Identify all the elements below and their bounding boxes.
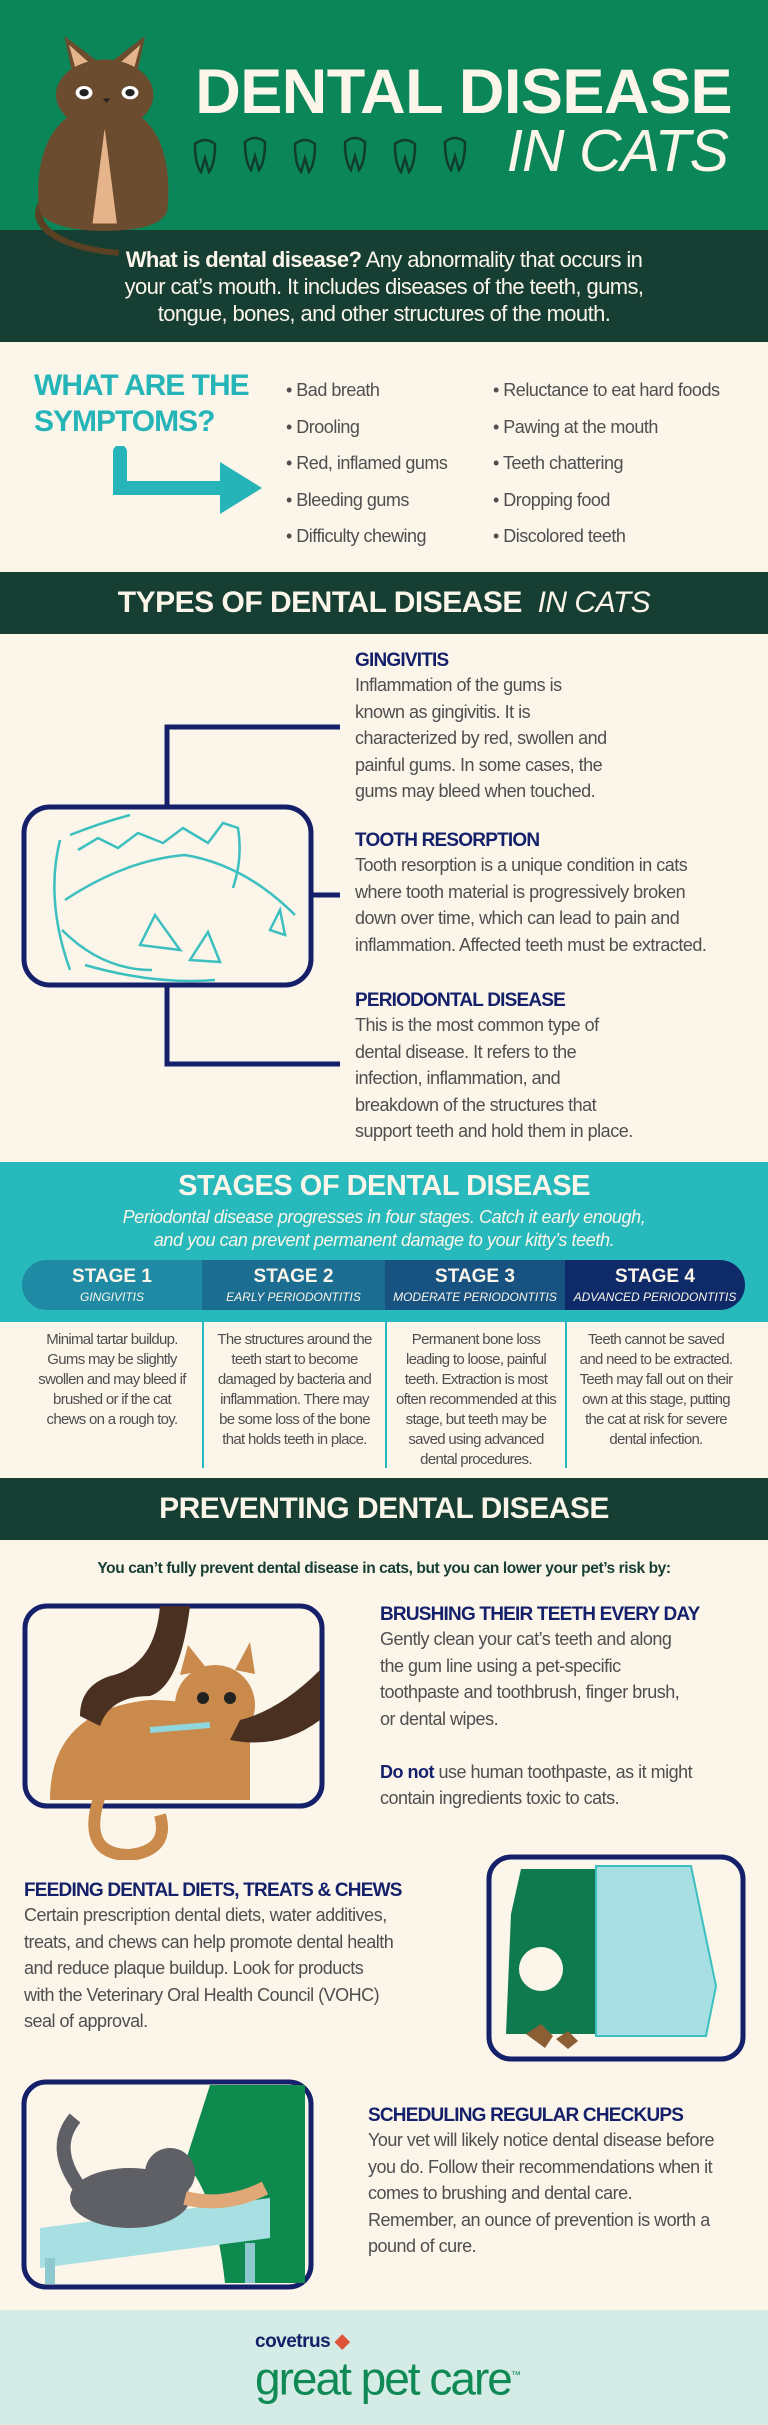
stage descriptions: be some loss of the bone (219, 1411, 370, 1428)
definition band (0, 230, 768, 342)
text: tooth resorption: inflammation. Affected teeth must be extracted. (355, 934, 706, 954)
stage pill: STAGE 4 (615, 1266, 695, 1287)
text: tooth resorption: Tooth resorption is a unique condition in cats (355, 855, 687, 875)
text: feeding (24, 1880, 402, 2031)
stage descriptions: dental procedures. (420, 1451, 532, 1468)
symptoms list: • Drooling (286, 416, 359, 436)
mouth diagram with connectors (22, 724, 340, 1066)
stage pill (22, 1260, 745, 1310)
illustration: vet checkup (22, 2080, 314, 2290)
stage descriptions (38, 1322, 733, 1468)
types band (0, 572, 768, 634)
symptoms list: • Red, inflamed gums (286, 453, 447, 473)
text: brushing: or dental wipes. (380, 1708, 498, 1728)
stage descriptions: teeth start to become (231, 1351, 358, 1368)
stage pill: MODERATE PERIODONTITIS (393, 1290, 557, 1304)
title: IN CATS (507, 118, 728, 184)
text: feeding: and reduce plaque buildup. Look for products (24, 1958, 363, 1978)
text: • Pawing at the mouth (493, 416, 658, 436)
text: • Discolored teeth (493, 526, 625, 546)
text: tooth resorption: where tooth material is progressively broken (355, 882, 685, 902)
text: periodontal: dental disease. It refers to the (355, 1042, 576, 1062)
stage descriptions: Permanent bone loss (412, 1331, 540, 1348)
text: • Reluctance to eat hard foods (493, 380, 719, 400)
preventing band (0, 1478, 768, 1540)
text: tooth resorption (355, 830, 706, 954)
text: feeding: treats, and chews can help promote dental health (24, 1932, 393, 1952)
text: gingivitis: characterized by red, swollen and (355, 728, 607, 748)
text: gingivitis: known as gingivitis. It is (355, 702, 530, 722)
text: checkups: SCHEDULING REGULAR CHECKUPS (368, 2105, 683, 2126)
symptoms heading: SYMPTOMS? (34, 405, 214, 438)
icon: row of teeth (194, 136, 466, 174)
text: periodontal: PERIODONTAL DISEASE (355, 990, 565, 1011)
stages subtitle: Periodontal disease progresses in four stages. Catch it early enough, (123, 1207, 645, 1227)
title (195, 57, 732, 184)
text: gingivitis (355, 650, 607, 801)
stage descriptions: swollen and may bleed if (38, 1371, 186, 1388)
text: feeding: with the Veterinary Oral Health Council (VOHC) (24, 1984, 379, 2004)
text: feeding: seal of approval. (24, 2011, 148, 2031)
stage pill: STAGE 2 (254, 1266, 333, 1287)
text: brushing: the gum line using a pet-specific (380, 1656, 621, 1676)
text: brushing (380, 1604, 700, 1808)
text: checkups: Remember, an ounce of prevention is worth a (368, 2210, 710, 2230)
definition band: tongue, bones, and other structures of the mouth. (158, 301, 610, 326)
text: checkups: you do. Follow their recommendations when it (368, 2156, 712, 2176)
stage descriptions: saved using advanced (408, 1431, 544, 1448)
arrow (113, 446, 262, 514)
logo: great pet care™ (255, 2352, 519, 2404)
illustration: food bags (486, 1854, 746, 2062)
stage pill: STAGE 3 (435, 1266, 515, 1287)
text: gingivitis: Inflammation of the gums is (355, 675, 562, 695)
stage pill: ADVANCED PERIODONTITIS (574, 1290, 736, 1304)
stage pill: STAGE 1 (72, 1266, 152, 1287)
header band (0, 0, 768, 230)
text: brushing: Gently clean your cat’s teeth and along (380, 1629, 671, 1649)
text: • Teeth chattering (493, 453, 623, 473)
stage descriptions: often recommended at this (396, 1391, 556, 1408)
text: checkups (368, 2105, 714, 2256)
types band: TYPES OF DENTAL DISEASE IN CATS (118, 586, 650, 619)
stages subtitle (123, 1207, 645, 1250)
symptoms list: • Difficulty chewing (286, 526, 426, 546)
stage descriptions: inflammation. There may (220, 1391, 369, 1408)
stage descriptions: stage, but teeth may be (406, 1411, 546, 1428)
logo: covetrus ◆ (255, 2331, 349, 2352)
definition band: your cat’s mouth. It includes diseases of the teeth, gums, (125, 274, 643, 299)
stage descriptions: Minimal tartar buildup. (46, 1331, 178, 1348)
illustration: brushing cat (22, 1604, 324, 1860)
stage descriptions: the cat at risk for severe (585, 1411, 727, 1428)
symptoms heading (34, 369, 249, 438)
text: periodontal: breakdown of the structures that (355, 1094, 596, 1114)
stage descriptions: Teeth may fall out on their (580, 1371, 732, 1388)
stage descriptions: leading to loose, painful (406, 1351, 546, 1368)
text: tooth resorption: down over time, which can lead to pain and (355, 908, 679, 928)
preventing band: PREVENTING DENTAL DISEASE (159, 1492, 609, 1525)
text: feeding: FEEDING DENTAL DIETS, TREATS & CHEWS (24, 1880, 402, 1901)
stage descriptions: teeth. Extraction is most (405, 1371, 547, 1388)
text: gingivitis: GINGIVITIS (355, 650, 448, 671)
stage pill: EARLY PERIODONTITIS (226, 1290, 361, 1304)
text: gingivitis: painful gums. In some cases, the (355, 754, 602, 774)
text: feeding: Certain prescription dental diets, water additives, (24, 1905, 387, 1925)
footer (0, 2310, 768, 2425)
stage pill: GINGIVITIS (80, 1290, 144, 1304)
text: periodontal (355, 990, 633, 1141)
symptoms list: • Bleeding gums (286, 490, 409, 510)
text: checkups: comes to brushing and dental care. (368, 2183, 632, 2203)
text: tooth resorption: TOOTH RESORPTION (355, 830, 539, 851)
text: checkups: pound of cure. (368, 2236, 476, 2256)
stage descriptions: brushed or if the cat (53, 1391, 171, 1408)
symptoms heading: WHAT ARE THE (34, 369, 249, 402)
stage descriptions: chews on a rough toy. (47, 1411, 177, 1428)
stages heading: STAGES OF DENTAL DISEASE (178, 1170, 590, 1202)
definition band: What is dental disease? Any abnormality that occurs in (126, 247, 642, 272)
stage descriptions: dental infection. (609, 1431, 703, 1448)
stage descriptions: Teeth cannot be saved (588, 1331, 724, 1348)
text: periodontal: infection, inflammation, and (355, 1068, 560, 1088)
stage descriptions: Gums may be slightly (47, 1351, 177, 1368)
stage descriptions: that holds teeth in place. (222, 1431, 367, 1448)
stages panel (0, 1162, 768, 1322)
icon: sitting brown cat (35, 36, 168, 256)
text: brushing: Do not use human toothpaste, as it might (380, 1762, 692, 1782)
intro line: You can’t fully prevent dental disease in cats, but you can lower your pet’s risk by: (97, 1560, 671, 1577)
stage descriptions: damaged by bacteria and (218, 1371, 371, 1388)
text: periodontal: This is the most common type of (355, 1015, 599, 1035)
stage descriptions: own at this stage, putting (582, 1391, 730, 1408)
stages subtitle: and you can prevent permanent damage to your kitty’s teeth. (154, 1230, 614, 1250)
text: brushing: BRUSHING THEIR TEETH EVERY DAY (380, 1604, 699, 1625)
symptoms list: • Bad breath (286, 380, 379, 400)
symptoms list (286, 380, 448, 546)
text: • Dropping food (493, 490, 610, 510)
title: DENTAL DISEASE (195, 57, 732, 127)
text: checkups: Your vet will likely notice dental disease before (368, 2130, 714, 2150)
text: brushing: toothpaste and toothbrush, finger brush, (380, 1682, 679, 1702)
text: gingivitis: gums may bleed when touched. (355, 781, 595, 801)
text: periodontal: support teeth and hold them in place. (355, 1121, 633, 1141)
stage descriptions: The structures around the (217, 1331, 372, 1348)
text: brushing: contain ingredients toxic to cats. (380, 1788, 619, 1808)
stage descriptions: and need to be extracted. (580, 1351, 732, 1368)
